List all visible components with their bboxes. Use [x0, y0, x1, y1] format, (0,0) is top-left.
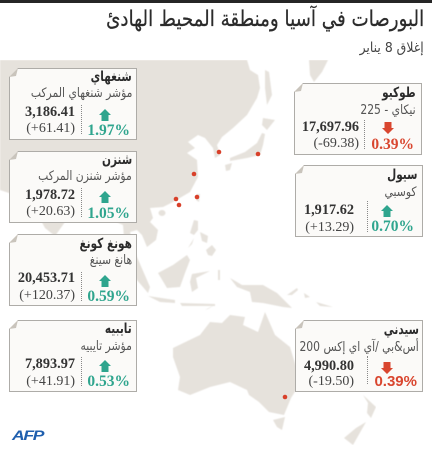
- panel: Sydney: سيدني: [384, 322, 419, 338]
- panel: Tokyo: 0.39%: [371, 136, 414, 153]
- panel: Shanghai: مؤشر شنغهاي المركب: [30, 86, 132, 101]
- panel: Shanghai: 3,186.41: [25, 104, 75, 120]
- panel: Seoul: سيول: [387, 167, 417, 183]
- panel: Taipei: (+41.91): [26, 374, 75, 389]
- panel: Hong Kong: 0.59%: [87, 288, 130, 305]
- icon: Hong Kong marker: [177, 203, 181, 207]
- panel: Hong Kong: [9, 234, 137, 306]
- panel: Tokyo: طوكيو: [383, 85, 416, 101]
- panel: Hong Kong: هونغ كونغ: [80, 236, 132, 252]
- panel: Shanghai: (+61.41): [26, 121, 75, 136]
- panel: Shenzhen: شنزن: [102, 152, 132, 168]
- panel: Shenzhen: مؤشر شنزن المركب: [38, 169, 132, 184]
- panel: Taipei: تايبيه: [105, 321, 132, 337]
- panel: Sydney: [295, 320, 423, 392]
- panel: Shanghai: [9, 68, 137, 140]
- panel: Shenzhen: [9, 151, 137, 223]
- panel: Sydney: (-19.50): [308, 374, 354, 389]
- panel: Tokyo: 17,697.96: [302, 119, 359, 135]
- panel: Hong Kong: (+120.37): [19, 288, 75, 303]
- panel: Tokyo: (-69.38): [314, 136, 359, 151]
- title: البورصات في آسيا ومنطقة المحيط الهادئ: [106, 7, 424, 32]
- panel: Taipei: مؤشر تايبيه: [81, 339, 132, 354]
- icon: Taipei marker: [195, 195, 199, 199]
- top bar: [0, 0, 432, 3]
- icon: Tokyo marker: [256, 152, 260, 156]
- panel: Shenzhen: (+20.63): [26, 204, 75, 219]
- panel: Hong Kong: هانغ سينغ: [90, 253, 132, 268]
- panel: Seoul: (+13.29): [305, 220, 354, 235]
- panel: Sydney: 4,990.80: [304, 358, 354, 374]
- panel: Seoul: [295, 165, 423, 237]
- icon: Shanghai marker: [192, 172, 196, 176]
- panel: Tokyo: 225 - نيكاي: [361, 103, 416, 118]
- icon: Seoul marker: [217, 150, 221, 154]
- panel: Sydney: 0.39%: [374, 373, 417, 390]
- icon: Sydney marker: [283, 395, 287, 399]
- AFP logo: AFP: [12, 428, 43, 443]
- panel: Seoul: 1,917.62: [304, 202, 354, 218]
- panel: Seoul: 0.70%: [371, 218, 414, 235]
- panel: Sydney: 200 أس&بي /آي اي إكس: [300, 340, 419, 355]
- panel: Shanghai: شنغهاي: [91, 69, 132, 85]
- panel: Taipei: 7,893.97: [25, 356, 75, 372]
- panel: Hong Kong: 20,453.71: [18, 270, 75, 286]
- icon: Shenzhen marker: [174, 197, 178, 201]
- subtitle: date: إغلاق 8 يناير: [360, 40, 424, 56]
- panel: Shanghai: 1.97%: [87, 122, 130, 139]
- panel: Shenzhen: 1,978.72: [25, 187, 75, 203]
- panel: Taipei: [9, 320, 137, 392]
- panel: Tokyo: [294, 83, 422, 155]
- panel: Shenzhen: 1.05%: [87, 205, 130, 222]
- panel: Seoul: كوسبي: [385, 185, 417, 200]
- panel: Taipei: 0.53%: [87, 373, 130, 390]
